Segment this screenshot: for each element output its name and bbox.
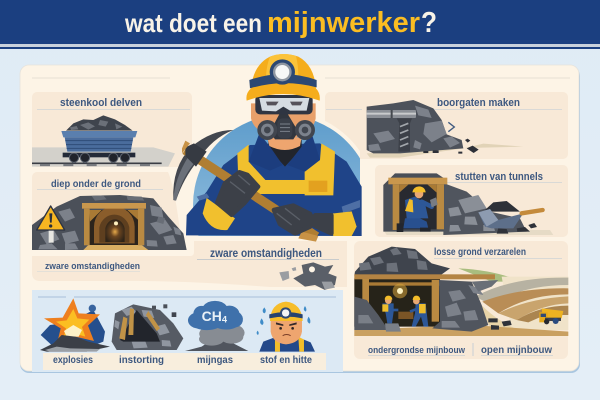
panel: zware omstandigheden (wide)	[32, 241, 347, 290]
title: mijnwerker	[267, 7, 420, 39]
body: coverall	[186, 133, 362, 236]
icon: coal cart on rails	[32, 115, 175, 167]
respirator and goggles	[255, 95, 315, 140]
vest	[237, 145, 266, 194]
panel: diep onder de grond	[32, 172, 187, 250]
open pit terraces	[475, 278, 568, 330]
backdrop circle	[193, 120, 360, 236]
figures: two miners	[382, 296, 428, 327]
illustration: mine entrance	[32, 195, 187, 250]
icon: warning sign	[37, 206, 65, 243]
header banner	[0, 0, 600, 49]
panel: boorgaten maken	[325, 92, 568, 159]
helmet	[246, 54, 320, 101]
icon: miner with sweat	[257, 302, 315, 352]
icon: methane cloud CH4	[185, 301, 248, 351]
panel: losse grond verzamelen	[354, 241, 568, 359]
panel: hazards	[32, 290, 343, 372]
title	[124, 7, 437, 39]
icon: collapsed tunnel	[112, 304, 183, 350]
glove finger lines	[230, 175, 300, 225]
title: ?	[421, 7, 437, 39]
label band	[43, 353, 326, 370]
icon: dump truck	[539, 308, 563, 324]
illustration: miner propping tunnel	[383, 173, 553, 235]
label: zware omstandigheden small: zware omstandigheden	[45, 261, 140, 272]
label: open mijnbouw: open mijnbouw	[481, 344, 553, 356]
heading: diep onder de grond: diep onder de grond	[51, 178, 141, 190]
illustration: drill in rock	[367, 100, 523, 158]
illustration: underground mine and open pit	[354, 247, 568, 336]
label: instorting: instorting	[119, 354, 164, 366]
cuffs	[203, 198, 235, 230]
main card	[20, 65, 580, 373]
text: CH4: CH	[202, 308, 222, 324]
gloves	[217, 172, 331, 233]
heading: losse grond verzamelen: losse grond verzarelen	[434, 246, 526, 258]
panel: steenkool delven	[32, 92, 192, 167]
icon: explosion	[40, 298, 110, 352]
neck	[267, 137, 302, 150]
pickaxe	[173, 130, 318, 242]
label: explosies: explosies	[53, 354, 93, 366]
title: wat doet een	[124, 8, 262, 38]
text: CH4: 4	[222, 314, 228, 324]
face	[251, 103, 316, 140]
heading: boorgaten maken: boorgaten maken	[437, 97, 520, 109]
figure: kneeling miner	[397, 186, 438, 232]
heading: stutten van tunnels: stutten van tunnels	[455, 171, 543, 183]
icon: rock fragments	[279, 262, 337, 290]
heading: steenkool delven: steenkool delven	[60, 97, 142, 109]
central miner figure	[173, 54, 362, 242]
panel: stutten van tunnels	[375, 165, 568, 237]
label: mijngas: mijngas	[197, 354, 233, 366]
label: zware omstandigheden large: zware omstandigheden	[210, 248, 322, 260]
label: stof en hitte: stof en hitte	[260, 354, 312, 366]
label: ondergrondse mijnbouw: ondergrondse mijnbouw	[368, 345, 466, 356]
